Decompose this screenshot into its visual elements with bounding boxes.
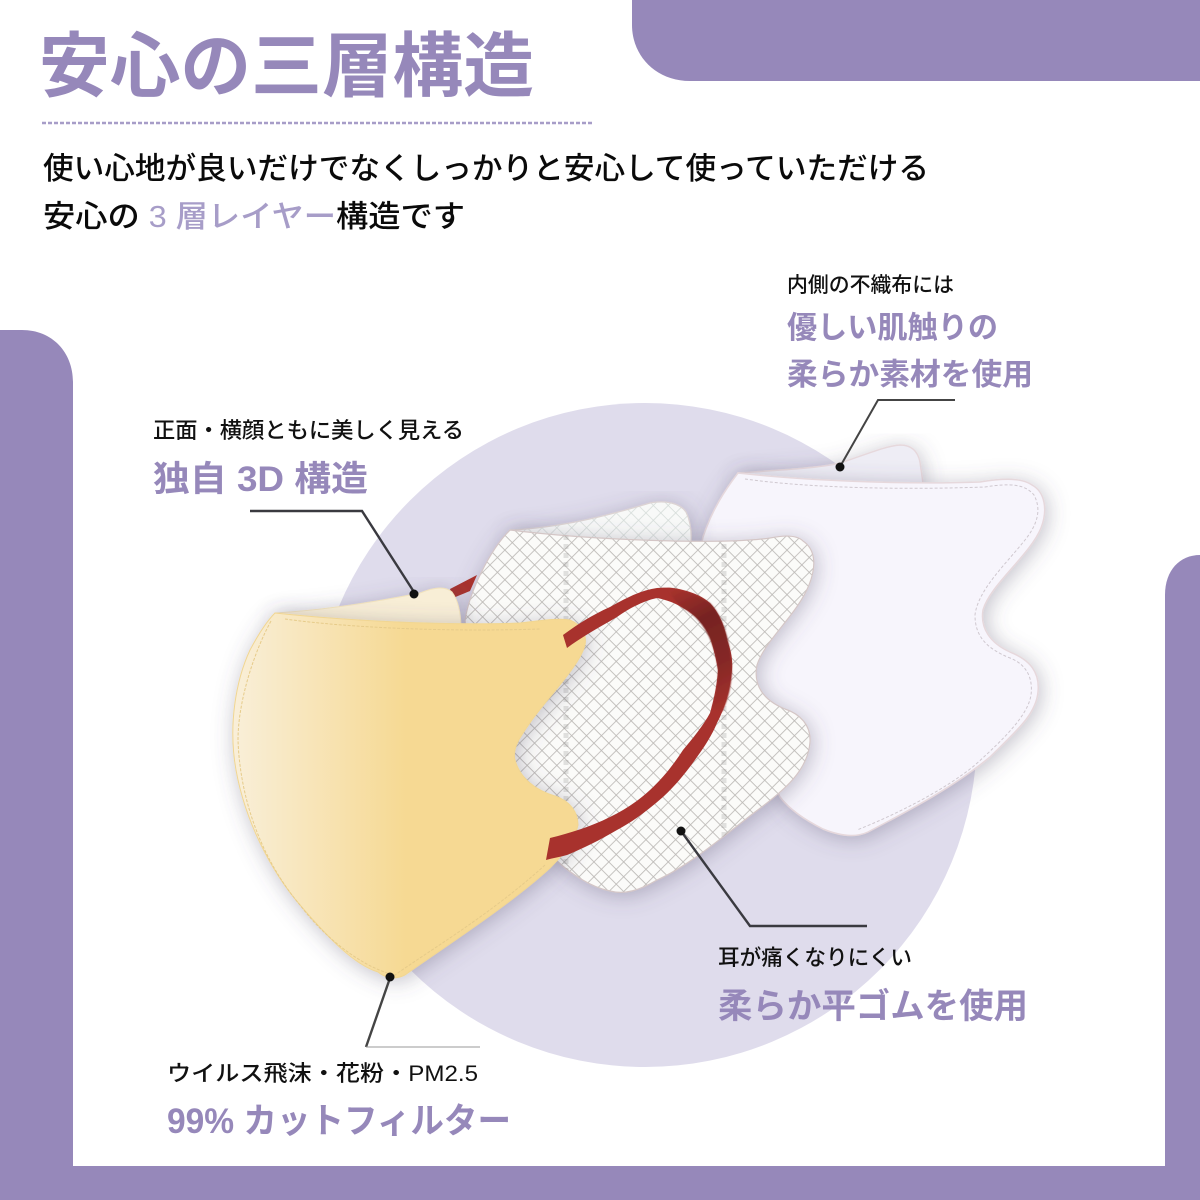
panel: left and bottom purple frame [0,330,1200,1200]
leader: soft material [836,400,955,472]
intro text: 使い心地が良いだけでなくしっかりと安心して使っていただける [43,152,929,186]
illustration: middle filter layer [465,502,814,892]
panel: right purple frame [1165,555,1200,1170]
title: 安心の三層構造 [39,28,534,107]
illustration: outer mask [233,588,585,978]
callout: soft ear strap: 柔らか平ゴムを使用 [718,987,1028,1026]
callout: 3D structure: 正面・横顔ともに美しく見える [153,418,464,443]
intro text: 安心の 3 層レイヤー 構造です [43,200,465,234]
outer mask back flap [275,588,461,630]
inner layer back flap [738,445,924,490]
intro text [43,152,929,234]
outer mask front [233,613,585,978]
callout: soft ear strap: 耳が痛くなりにくい [718,946,912,970]
filter layer front with mesh [465,530,814,892]
ear strap far side [450,575,477,598]
outer mask stitching [238,619,545,975]
illustration: inner layer mask [690,445,1045,836]
strap inner shading [668,588,732,712]
leader: 3D structure [250,511,418,598]
panel: top right purple tab [632,0,1200,81]
callout: inner fabric: 柔らか素材を使用 [787,358,1033,392]
inner layer front [690,473,1045,836]
callout: soft ear strap [718,946,1028,1026]
leader: cut filter [366,972,480,1047]
background circle [313,403,977,1067]
title dotted divider [42,122,594,124]
leader: soft ear strap [676,826,867,926]
callout: 3D structure: 独自 3D 構造 [153,460,368,499]
callout: cut filter: ウイルス飛沫・花粉・PM2.5 [167,1061,478,1086]
filter layer back flap [510,502,691,545]
ear strap [546,588,732,860]
callout: inner fabric: 優しい肌触りの [787,311,998,345]
strap band [546,588,732,860]
callout: inner fabric: 内側の不織布には [787,274,954,297]
callout: inner fabric [787,274,1033,392]
callout: 3D structure [153,418,464,499]
inner layer stitching [745,479,1038,830]
callout: cut filter [167,1061,511,1141]
callout: cut filter: 99% カットフィルター [167,1102,511,1141]
filter layer pleat seams [566,535,724,880]
